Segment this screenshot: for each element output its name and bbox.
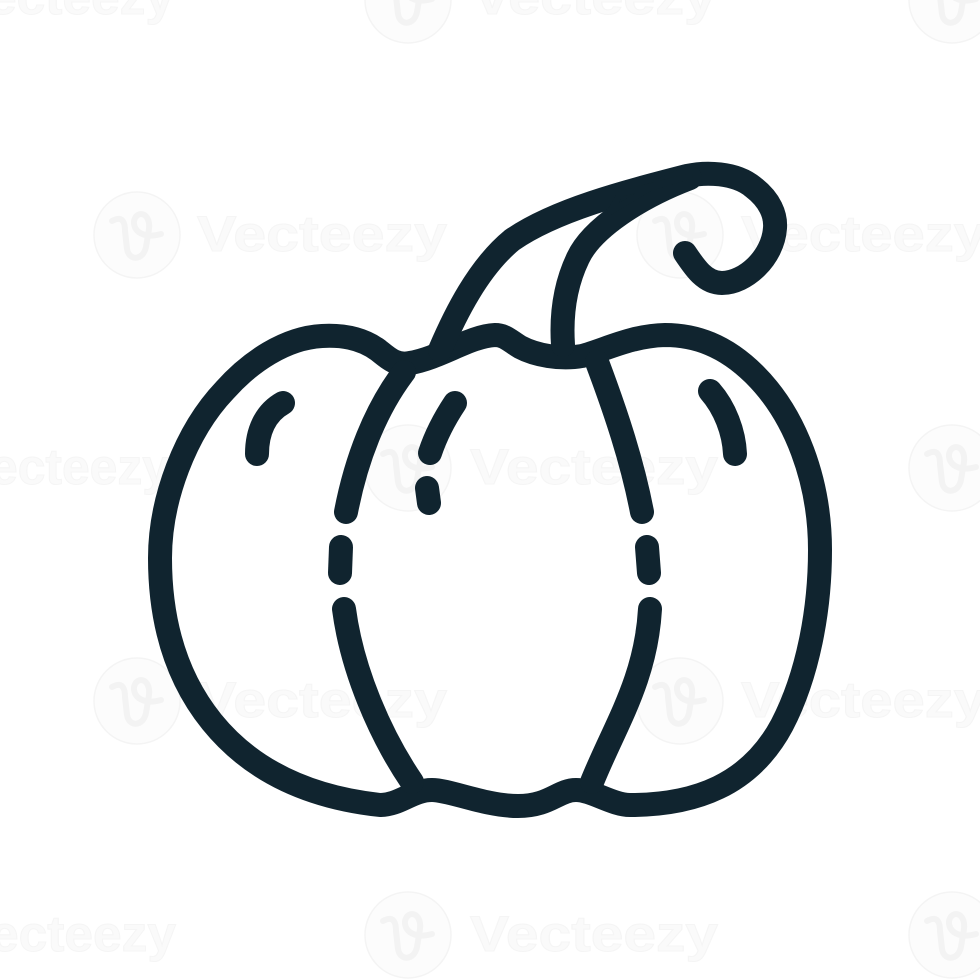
stem inner curve <box>563 178 690 345</box>
left inner rib <box>340 372 412 782</box>
watermark pattern: Vecteezy <box>197 206 447 262</box>
pumpkin stem <box>440 174 775 350</box>
pumpkin body outline <box>160 335 820 806</box>
watermark pattern: Vecteezy <box>197 672 447 728</box>
right inner rib <box>592 362 650 782</box>
highlight: right lobe <box>710 391 735 454</box>
watermark pattern: Vecteezy <box>741 206 980 262</box>
watermark pattern: Vecteezy <box>470 439 718 495</box>
highlight: center lobe <box>427 403 455 503</box>
stem junction fill <box>610 176 690 212</box>
watermark pattern: Vecteezy <box>470 906 718 962</box>
highlight: left lobe <box>257 403 283 454</box>
watermark pattern: Vecteezy <box>741 672 980 728</box>
icon: pumpkin <box>160 174 820 806</box>
